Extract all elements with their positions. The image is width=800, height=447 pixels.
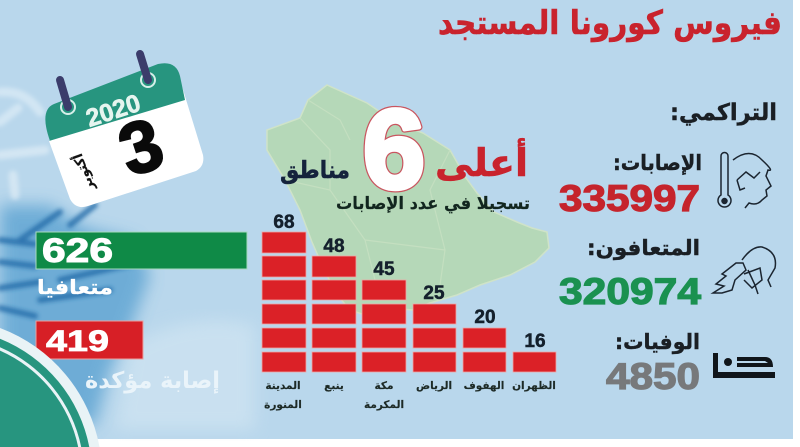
recovered label: متعافيا (37, 275, 113, 299)
value: 320974 (559, 271, 701, 312)
heading: top 6 regions (280, 87, 530, 214)
label: الإصابات: (613, 151, 702, 175)
stat: recovered (559, 236, 775, 312)
value: 4850 (606, 356, 700, 397)
bar labels: المكرمة (364, 399, 404, 411)
bar: Medina (262, 232, 306, 372)
bar values: 45 (373, 259, 395, 280)
word: regions: مناطق (280, 156, 350, 184)
bar labels: الرياض (416, 380, 452, 392)
calendar day: 3 (109, 103, 173, 192)
bar labels (264, 380, 556, 411)
green bar: recovered today (36, 232, 247, 270)
background virus image (0, 92, 255, 430)
bar: Riyadh (413, 304, 456, 372)
stat: infections (559, 151, 771, 219)
green bar: recovered today: 626 (42, 232, 113, 270)
word: highest: أعلى (435, 138, 528, 185)
label: الوفيات: (615, 330, 700, 354)
calendar icon (45, 54, 203, 207)
red bar: confirmed today (36, 321, 143, 359)
bar labels: المدينة (265, 380, 301, 392)
calendar page (49, 66, 203, 207)
bar values: 25 (423, 283, 445, 304)
confirmed label: إصابة مؤكدة (85, 368, 220, 394)
bar: Makkah (362, 280, 406, 372)
bar values: 20 (474, 307, 496, 328)
bar labels: الهفوف (464, 380, 504, 392)
bar labels: ينبع (324, 380, 344, 392)
subtitle: تسجيلا في عدد الإصابات (336, 194, 530, 214)
heading: cumulative: التراكمي: (670, 100, 777, 126)
calendar rings (60, 54, 155, 114)
bar values: 16 (524, 331, 546, 352)
red bar: confirmed today: 419 (46, 325, 109, 358)
bar values (273, 212, 546, 352)
value: 335997 (559, 178, 700, 219)
icon: bed (713, 353, 775, 378)
bar chart (262, 212, 556, 411)
bar labels: المنورة (264, 399, 302, 411)
icon: temperature check (713, 247, 775, 294)
big number 6: 6 (363, 87, 425, 212)
bar values: 68 (273, 212, 295, 233)
big number 6: 6 (363, 87, 425, 212)
bar labels: مكة (375, 380, 393, 392)
stat: deaths (606, 330, 775, 397)
calendar month: أكتوبر (69, 151, 98, 194)
calendar header (45, 63, 185, 141)
icon: thermometer and face (718, 152, 771, 208)
bar: Yanbu (312, 256, 356, 372)
label: المتعافون: (587, 236, 700, 260)
bar values: 48 (323, 236, 345, 257)
map of Saudi Arabia (267, 85, 549, 316)
teal corner circle (0, 328, 100, 447)
calendar year: 2020 (83, 89, 144, 133)
bar: Hofuf (463, 328, 506, 372)
bar labels: الظهران (512, 380, 556, 392)
bar: Dhahran (513, 352, 556, 372)
